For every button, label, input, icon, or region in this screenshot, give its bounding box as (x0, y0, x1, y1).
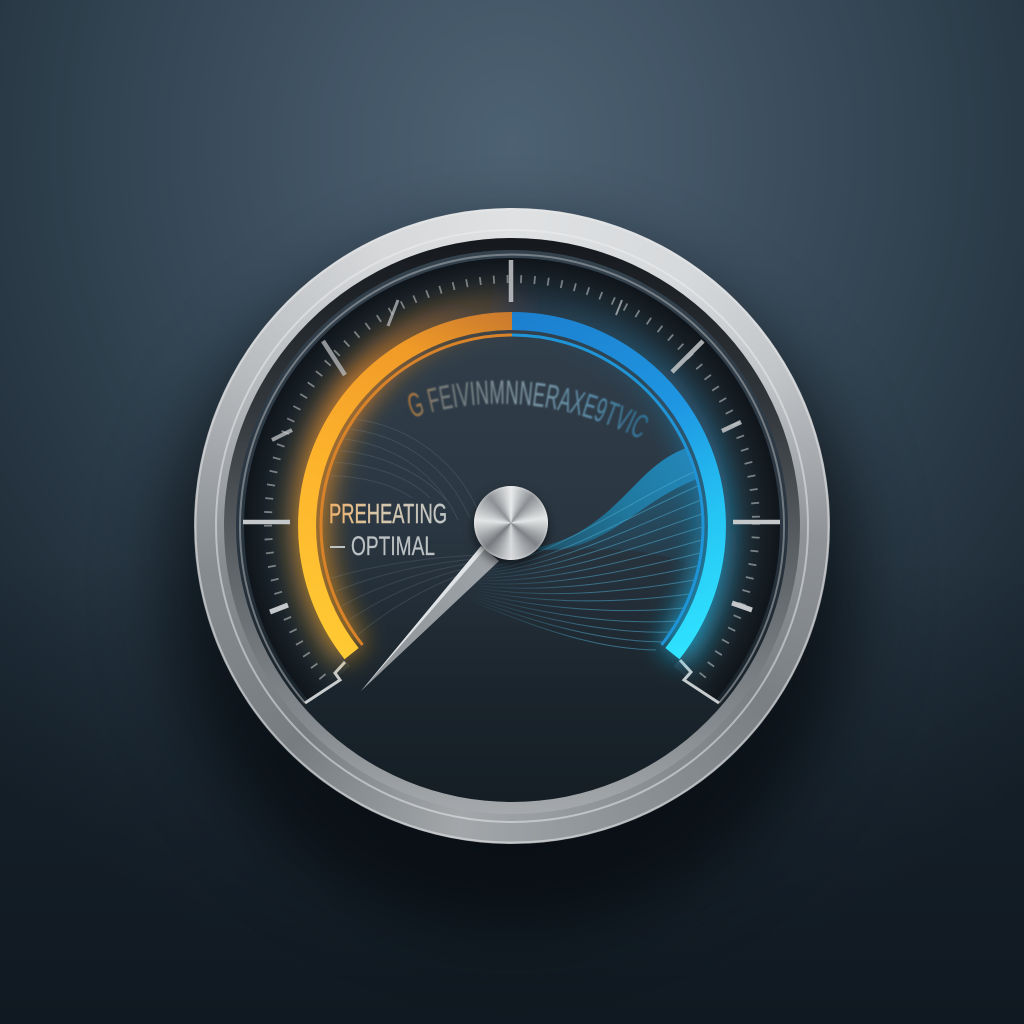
dial face (236, 250, 788, 802)
needle (361, 546, 499, 691)
gauge dial (194, 231, 830, 844)
needle hub (474, 486, 548, 560)
scale frame line (240, 255, 784, 703)
curved micro-scale text (407, 380, 649, 438)
status label: optimal (330, 531, 435, 561)
scale band (271, 285, 753, 767)
bezel highlights (196, 210, 828, 842)
status label: preheating: PREHEATING (329, 498, 447, 529)
curved micro-scale text: G FEIVINMNNERAXE9TVIC (407, 380, 649, 438)
left contour lines (331, 419, 477, 634)
silver bezel ring (194, 208, 830, 844)
orange preheat arc (307, 321, 512, 654)
minor ticks (264, 275, 760, 680)
blue wave ribbon and lines (478, 448, 702, 650)
inner groove ring (224, 238, 800, 814)
status label: optimal: OPTIMAL (351, 531, 435, 561)
arc glow (311, 304, 713, 654)
blue optimal arc (512, 321, 717, 654)
major ticks (243, 260, 780, 612)
